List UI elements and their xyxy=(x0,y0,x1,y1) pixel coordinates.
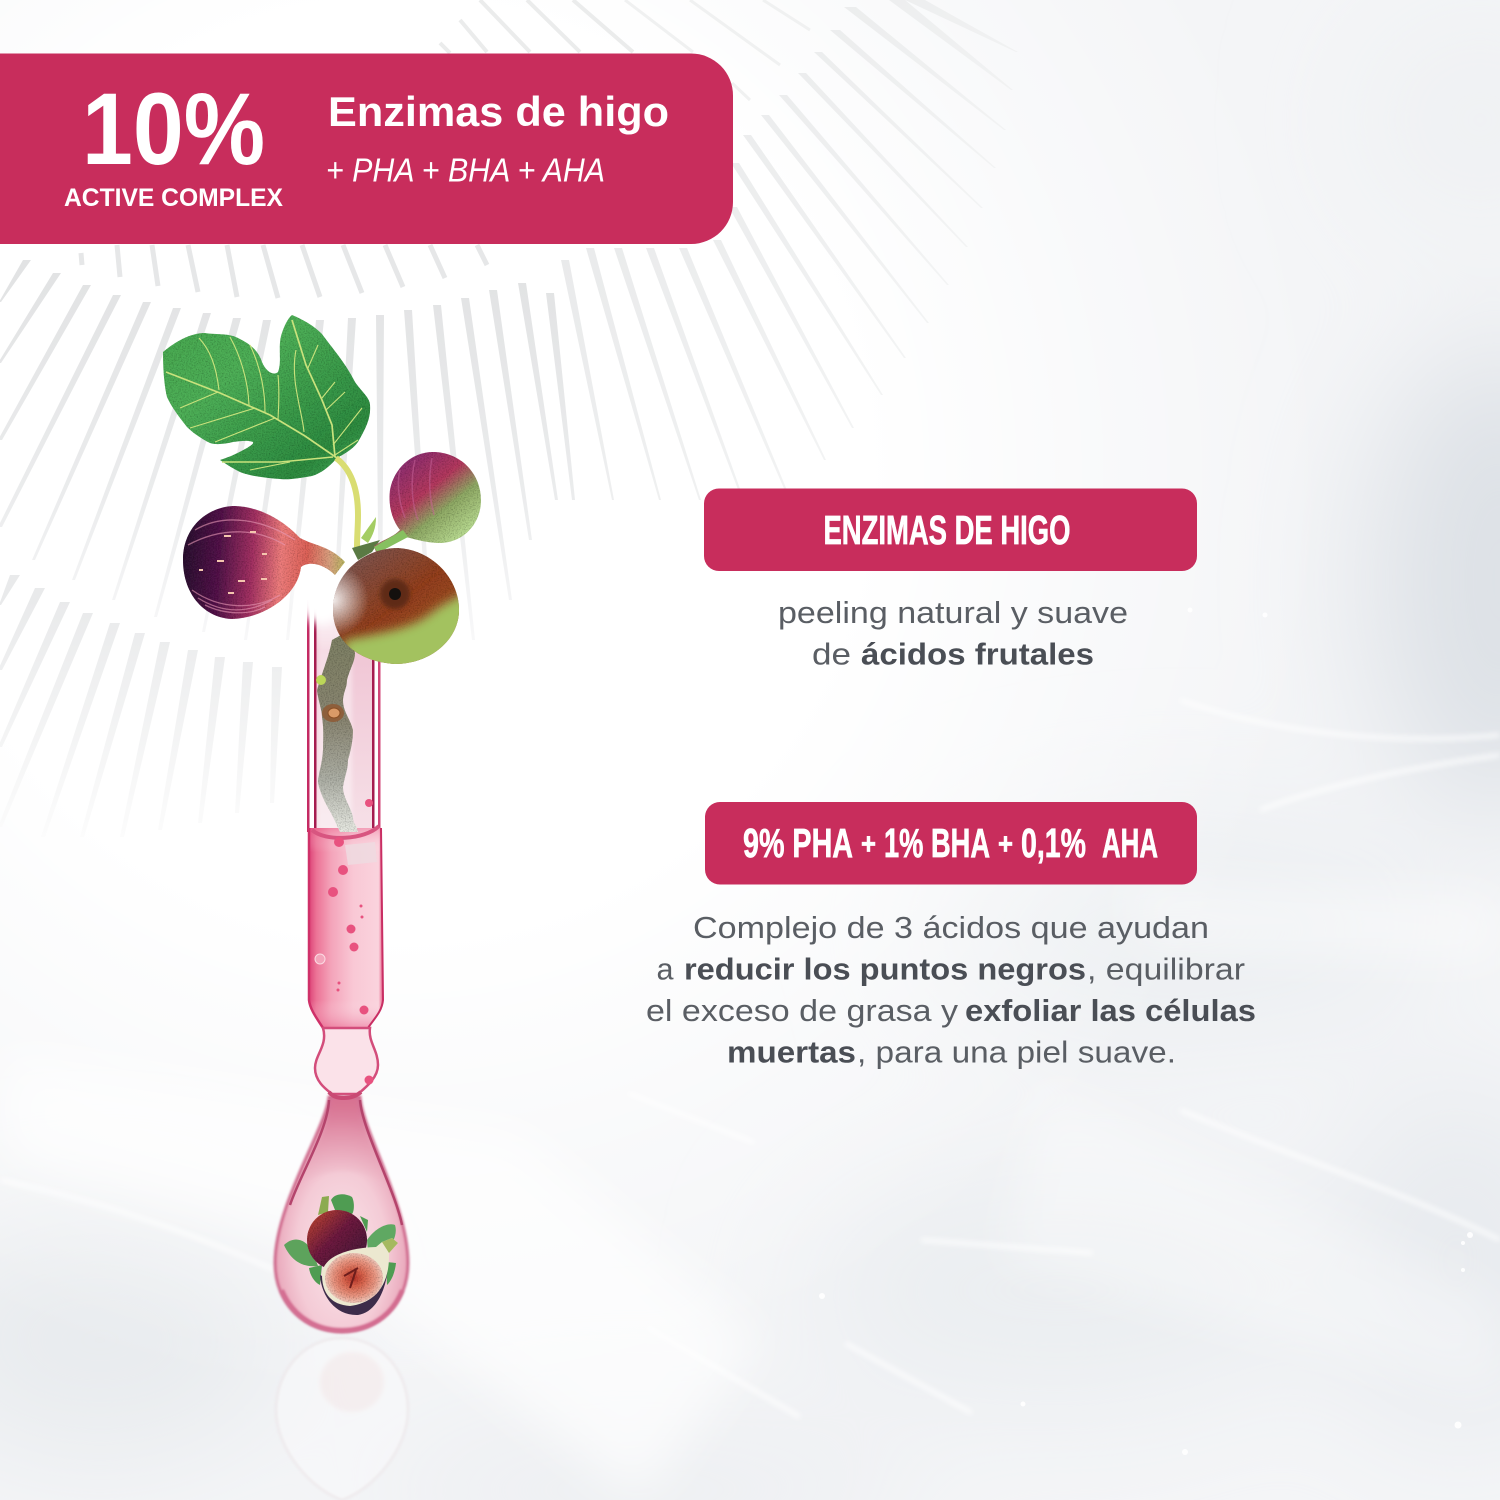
white light flare at tube top xyxy=(295,556,347,624)
text: natural peel: de xyxy=(812,638,851,672)
pill: acid percentages: 1% BHA xyxy=(884,820,990,866)
drop whole fig xyxy=(307,1196,367,1270)
big percentage: 10% xyxy=(82,72,265,186)
fig: left purple xyxy=(183,506,345,619)
pill: acid percentages: 0,1% xyxy=(1021,820,1086,866)
pill: acid percentages: + xyxy=(861,828,876,861)
lower bulb xyxy=(315,1028,378,1094)
fig: right small xyxy=(374,452,481,553)
bubbles xyxy=(315,799,373,1014)
drop leaves xyxy=(284,1194,396,1285)
fig leaf xyxy=(163,315,370,479)
branch xyxy=(316,630,358,832)
drop half fig xyxy=(320,1238,398,1315)
empty upper glass xyxy=(307,580,381,832)
text: natural peel: peeling natural y suave xyxy=(778,596,1128,630)
pill: acid percentages: 9% PHA xyxy=(743,820,853,866)
text: complex description: a xyxy=(656,952,674,986)
section 1: fig enzymes xyxy=(704,488,1197,672)
text: natural peel: ácidos frutales xyxy=(861,638,1094,672)
fig: centre round xyxy=(333,548,459,664)
ray ring: right fan xyxy=(561,0,1018,500)
text: complex description: exfoliar las células xyxy=(965,994,1256,1028)
text: complex description: reducir los puntos negros xyxy=(684,952,1086,986)
section 2: acid complex xyxy=(646,802,1256,1070)
active complex label: ACTIVE COMPLEX xyxy=(64,184,283,212)
ray ring: middle left xyxy=(0,260,575,640)
leaf stem xyxy=(336,458,380,560)
pill: acid percentages: AHA xyxy=(1102,820,1158,866)
text: complex description: , equilibrar xyxy=(1087,952,1245,986)
text: complex description xyxy=(646,911,1256,1070)
pill: acid percentages xyxy=(705,802,1197,884)
text: complex description: el exceso de grasa y xyxy=(646,994,959,1028)
banner heading: Enzimas de higo xyxy=(328,88,669,135)
top banner xyxy=(0,54,733,244)
reflection of drop xyxy=(276,1338,408,1500)
text: complex description: , para una piel suave. xyxy=(857,1036,1176,1070)
dropper tube xyxy=(307,580,383,1094)
text: complex description: muertas xyxy=(727,1036,856,1070)
sparkles xyxy=(819,608,1473,1455)
text: natural peel xyxy=(778,596,1128,672)
text: complex description: Complejo de 3 ácidos que ayudan xyxy=(693,911,1209,945)
pill: acid percentages: + xyxy=(998,828,1013,861)
pill: enzimas de higo xyxy=(704,488,1197,571)
drop with figs xyxy=(275,1092,408,1332)
banner sub heading: + PHA + BHA + AHA xyxy=(326,152,605,188)
pill: enzimas de higo: ENZIMAS DE HIGO xyxy=(824,507,1070,553)
ray ring: lower left xyxy=(0,575,282,837)
ray ring: directly below banner and above banner xyxy=(81,0,810,298)
pink liquid xyxy=(309,799,383,1030)
decorative sun rays xyxy=(0,0,1018,837)
